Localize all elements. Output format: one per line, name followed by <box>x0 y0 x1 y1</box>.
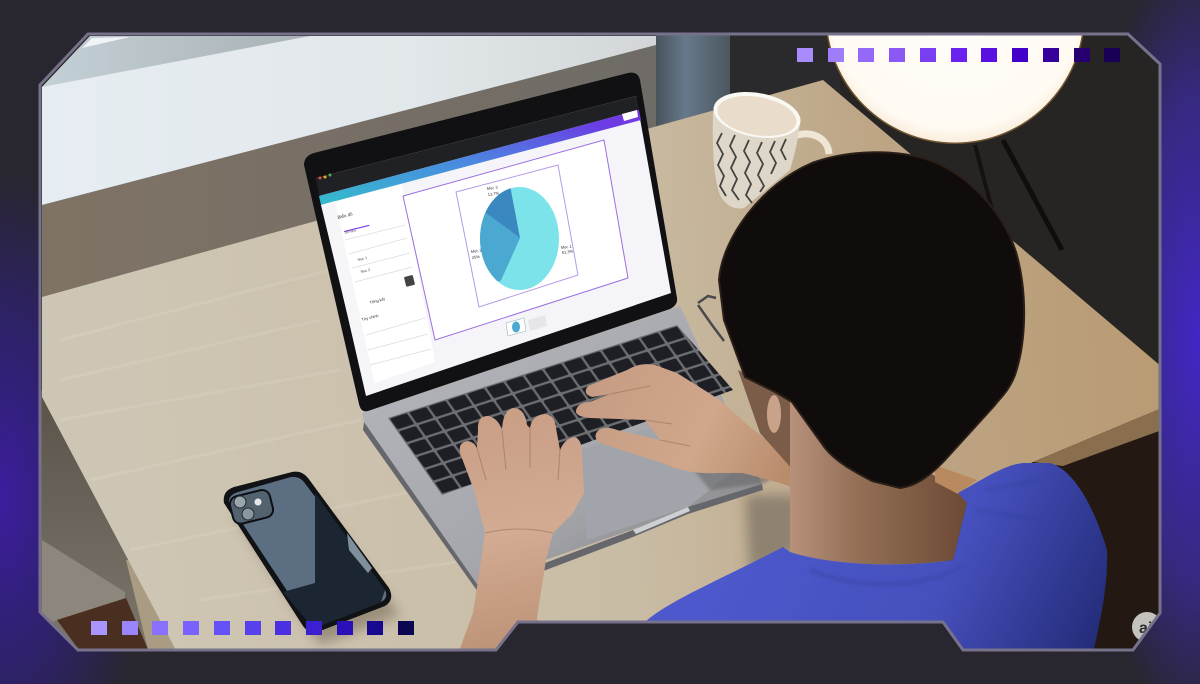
editor header bar <box>319 110 641 205</box>
wall between window and desk <box>42 45 656 300</box>
head with dark hair <box>719 152 1024 488</box>
chart box <box>456 165 578 307</box>
decorative squares bottom left <box>91 621 414 635</box>
laptop screen <box>304 73 677 411</box>
pie chart: 61,3% <box>561 248 574 255</box>
editor side panel: Mục 2 <box>360 268 371 274</box>
pie chart: Mục 3 <box>486 184 499 191</box>
mug with zigzag pattern <box>710 86 829 208</box>
pie chart: Mục 2 <box>470 247 483 254</box>
editor side panel: Mục 1 <box>357 256 368 262</box>
shirt <box>635 463 1107 654</box>
pie chart: 13,7% <box>487 190 500 197</box>
page thumbnail <box>506 315 547 336</box>
desk <box>42 80 1162 654</box>
pie chart: 25% <box>471 254 481 260</box>
pie chart <box>471 186 573 290</box>
pie chart: Mục 1 <box>560 243 573 250</box>
editor side panel <box>321 184 435 392</box>
editor side panel: Tổng kết <box>369 296 386 305</box>
window sill <box>42 36 656 205</box>
browser tab bar <box>316 96 639 196</box>
editor side panel: Tùy chỉnh <box>361 313 379 322</box>
left hand and forearm <box>458 408 584 654</box>
lower wall and floor <box>40 390 1162 655</box>
trackpad <box>587 469 714 540</box>
export button <box>622 110 638 121</box>
room backdrop <box>42 36 1158 390</box>
watermark badge <box>1132 612 1156 640</box>
editor side panel: Biểu đồ <box>337 210 354 220</box>
neck <box>738 370 977 564</box>
right hand and forearm <box>576 364 800 490</box>
ear <box>767 395 781 433</box>
glasses <box>698 296 724 341</box>
design page with purple border <box>403 140 628 340</box>
phone camera <box>228 488 275 525</box>
keyboard <box>388 325 733 495</box>
editor side panel: Dữ liệu <box>344 228 356 235</box>
watermark badge: ai <box>1139 620 1152 637</box>
decorative squares top right <box>797 48 1120 62</box>
lamp <box>826 36 1084 251</box>
phone <box>224 472 400 645</box>
laptop base <box>362 306 780 592</box>
